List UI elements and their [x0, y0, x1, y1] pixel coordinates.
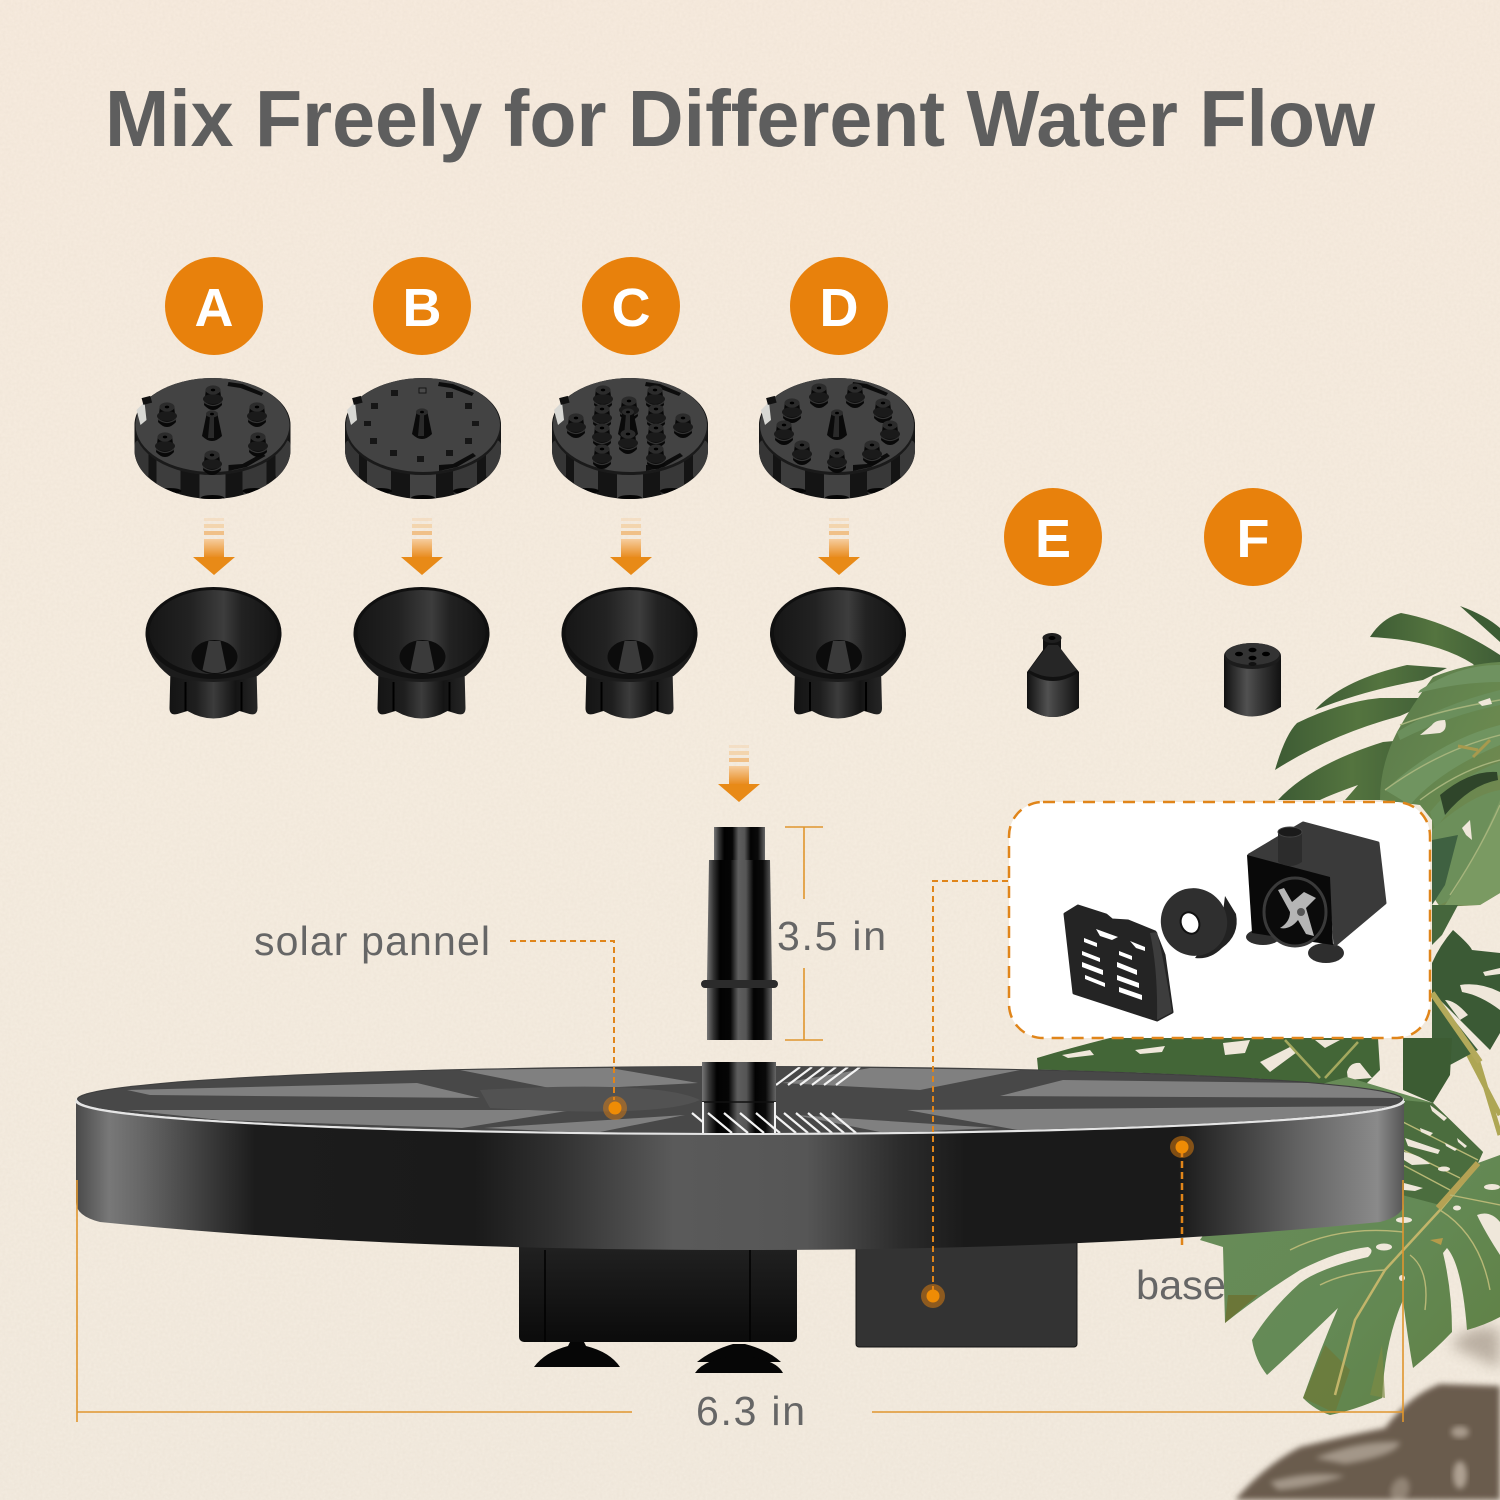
arrow to stem [718, 745, 760, 802]
title: Mix Freely for Different Water Flow [105, 74, 1376, 163]
badge B [373, 257, 471, 355]
monstera plant [1037, 606, 1500, 1415]
label: base: base [1136, 1262, 1226, 1308]
badge C [582, 257, 680, 355]
left pump block [519, 1240, 797, 1342]
stems [1432, 993, 1500, 1135]
connector cup C [562, 587, 698, 718]
tube socket [702, 1062, 776, 1133]
callout: base marker [1170, 1136, 1194, 1247]
badge B: B [402, 278, 442, 338]
badge D [790, 257, 888, 355]
nozzle disc A [134, 378, 290, 504]
badge C: C [612, 278, 650, 338]
pump filter grille [1065, 906, 1172, 1020]
upper leaf lobes [1275, 606, 1500, 945]
nozzle disc C [552, 378, 708, 504]
nozzle disc D [759, 378, 915, 504]
badge F [1204, 488, 1302, 586]
callout: solar pannel [254, 918, 627, 1120]
arrow C [610, 518, 652, 575]
dimension: width 6.3 in [77, 1180, 1403, 1434]
nozzle E [1027, 633, 1079, 717]
callout box: pump parts [1009, 802, 1430, 1038]
pump impeller cap [1150, 877, 1238, 967]
nozzle F [1224, 643, 1281, 716]
arrow D [818, 518, 860, 575]
connector cup B [354, 587, 490, 718]
nozzle disc B [345, 378, 501, 504]
solar fountain base [70, 1060, 1410, 1373]
badge E: E [1035, 509, 1071, 569]
right pump block [856, 1240, 1077, 1347]
callout: pump marker [921, 881, 1008, 1308]
badge A [165, 257, 263, 355]
leaf band behind disc [1037, 1038, 1452, 1103]
badge A: A [194, 278, 234, 338]
dimension: height 3.5 in [777, 827, 886, 1040]
arrow B [401, 518, 443, 575]
main lower leaf [1200, 1077, 1500, 1415]
dimension: height 3.5 in: 3.5 in [777, 913, 886, 959]
connector cup A [146, 587, 282, 718]
arrow A [193, 518, 235, 575]
callout: solar pannel: solar pannel [254, 918, 490, 964]
connector cup D [770, 587, 906, 718]
riser tube [701, 827, 778, 1040]
disc side wall [76, 1100, 1404, 1250]
badge D: D [820, 278, 858, 338]
dimension: width 6.3 in: 6.3 in [696, 1388, 805, 1434]
decorative plant shadow [1235, 1327, 1500, 1500]
solar panel top [75, 1066, 1405, 1135]
badge F: F [1236, 509, 1270, 569]
badge E [1004, 488, 1102, 586]
pump body [1246, 823, 1385, 963]
suction feet [534, 1342, 783, 1373]
right lower leaf [1432, 930, 1500, 1065]
